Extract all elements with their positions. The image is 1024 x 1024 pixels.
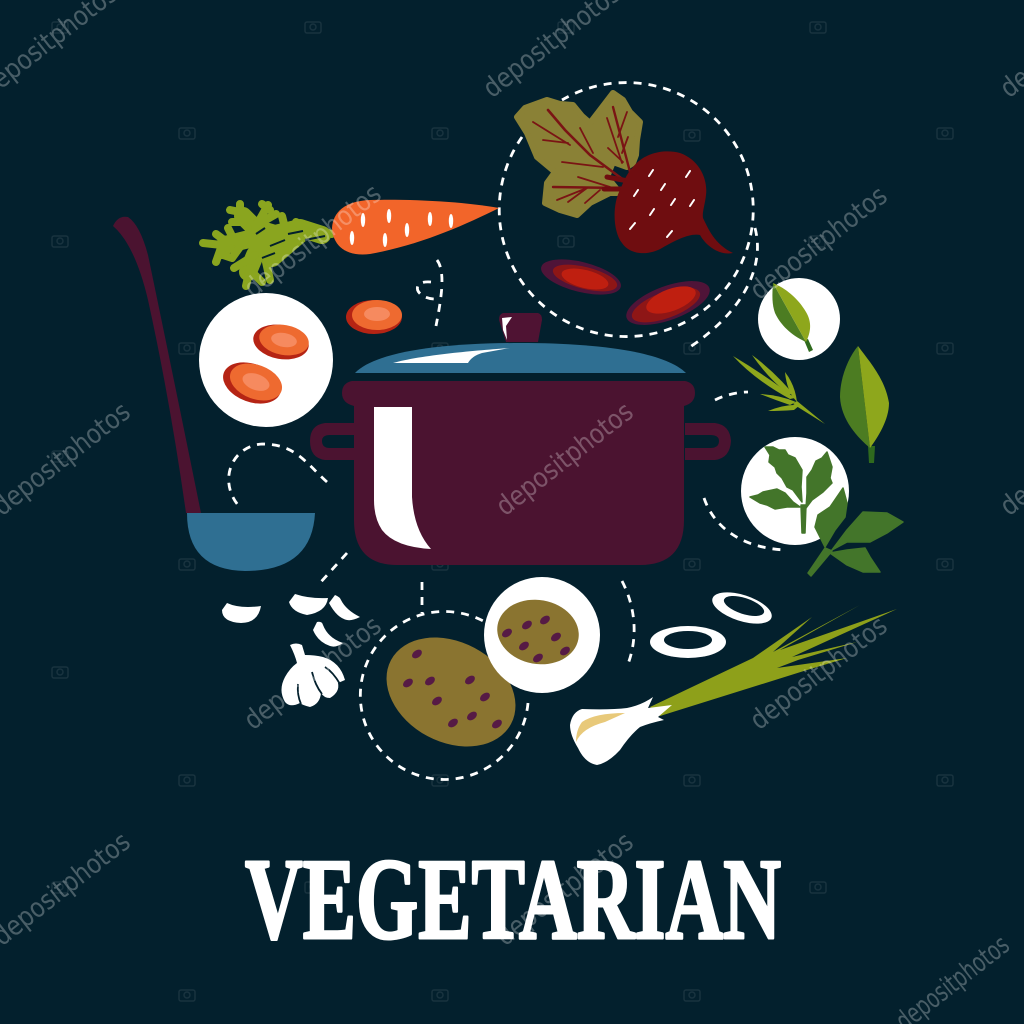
carrot: [203, 200, 499, 286]
bay leaf: [840, 346, 889, 463]
onion rings: [650, 586, 776, 658]
rosemary sprig: [733, 355, 825, 424]
garlic bulb: [282, 644, 345, 707]
watermark: depositphotos: [490, 396, 639, 522]
carrot slice: [346, 300, 402, 334]
beet leaves: [517, 93, 640, 215]
beet: [517, 93, 733, 254]
beet veins: [533, 107, 630, 203]
plate with parsley: [741, 437, 849, 545]
pot body: [342, 381, 695, 565]
parsley sprig: [808, 488, 903, 576]
garlic cloves: [222, 594, 360, 647]
pot lid: [355, 343, 686, 373]
beet root: [615, 151, 733, 254]
plate with potato: [484, 577, 600, 693]
ladle: [113, 217, 315, 571]
title: VEGETARIAN: [245, 836, 781, 964]
pot handles: [310, 423, 731, 460]
lid knob: [499, 313, 542, 342]
lid highlight: [393, 348, 510, 363]
carrot root: [332, 200, 499, 254]
watermark: depositphotos: [490, 826, 639, 952]
carrot greens: [203, 204, 332, 286]
pot: [310, 313, 731, 565]
green slits: [256, 228, 325, 258]
plate with bay leaf: [758, 278, 840, 360]
watermark: depositphotos: [238, 610, 387, 736]
plate with carrot slices: [199, 293, 333, 427]
watermark: depositphotos: [744, 610, 893, 736]
pot highlight: [374, 407, 431, 549]
dashed paths: [229, 83, 785, 780]
watermark: depositphotos: [238, 178, 387, 304]
spring onion: [570, 605, 897, 765]
watermark: depositphotos: [744, 180, 893, 306]
potato: [367, 616, 535, 768]
beet slices: [538, 253, 715, 334]
